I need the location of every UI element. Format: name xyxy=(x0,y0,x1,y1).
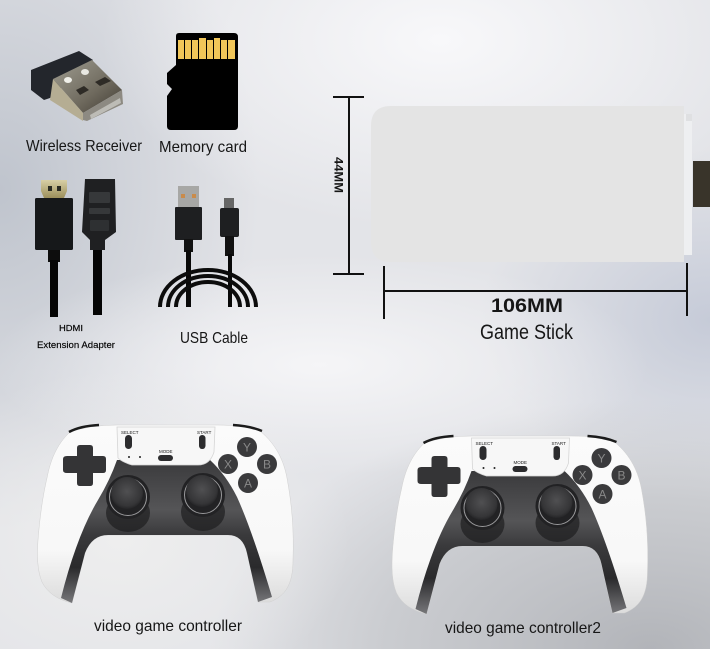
mode button: MODE xyxy=(514,460,527,465)
mode button xyxy=(512,460,528,472)
panel: HDMI extension adapter xyxy=(35,179,116,351)
icon: micro-USB plug xyxy=(220,198,239,307)
d-pad xyxy=(418,456,460,497)
icon: cable coil xyxy=(160,270,256,307)
indicator dots xyxy=(482,467,496,469)
face buttons: Y xyxy=(597,452,606,466)
face buttons xyxy=(572,448,632,504)
panel: game stick xyxy=(332,97,710,344)
start button xyxy=(552,441,566,460)
label: 44MM: 44MM xyxy=(332,157,346,193)
icon: HDMI female plug xyxy=(82,179,116,315)
height dimension line xyxy=(333,97,364,274)
label: video game controller: video game controller xyxy=(94,618,243,635)
touchpad xyxy=(472,438,570,476)
face buttons: X xyxy=(578,468,587,482)
face buttons xyxy=(218,437,277,493)
start button: START xyxy=(197,430,212,435)
game stick body xyxy=(371,106,692,262)
game stick plug xyxy=(693,161,710,207)
icon: HDMI male plug xyxy=(35,180,73,317)
mode button xyxy=(158,449,173,461)
indicator dots xyxy=(128,456,141,458)
label: Memory card: Memory card xyxy=(159,139,247,156)
panel: memory card xyxy=(159,33,247,156)
controller illustration xyxy=(37,425,293,603)
face buttons: B xyxy=(263,458,271,472)
select button: SELECT xyxy=(476,441,493,446)
select button xyxy=(121,430,139,449)
right thumbstick xyxy=(181,473,225,531)
label: 106MM: 106MM xyxy=(491,296,563,317)
face buttons: A xyxy=(598,488,607,502)
select button: SELECT xyxy=(121,430,139,435)
face buttons: B xyxy=(617,468,626,482)
panel: video game controller xyxy=(37,425,293,635)
shoulder buttons xyxy=(69,425,262,432)
face buttons: X xyxy=(224,458,232,472)
dark center panel xyxy=(416,471,626,614)
start button: START xyxy=(552,441,566,446)
icon: micro SD card xyxy=(167,33,238,130)
label: Extension Adapter: Extension Adapter xyxy=(37,340,115,351)
controller body xyxy=(392,436,648,614)
face buttons: Y xyxy=(243,440,251,454)
shoulder buttons xyxy=(424,436,616,443)
dark center panel xyxy=(61,460,272,603)
start button xyxy=(197,430,212,449)
left thumbstick xyxy=(460,486,504,543)
d-pad xyxy=(63,445,106,486)
panel: USB cable xyxy=(160,186,256,347)
mode button: MODE xyxy=(159,449,172,454)
panel: wireless receiver xyxy=(26,51,143,155)
icon: wireless receiver dongle xyxy=(31,51,123,121)
panel: video game controller 2 xyxy=(392,436,648,637)
width dimension line xyxy=(384,263,687,319)
controller body xyxy=(37,425,293,603)
label: HDMI: HDMI xyxy=(59,323,83,333)
face buttons: A xyxy=(244,476,252,490)
select button xyxy=(476,441,493,460)
right thumbstick xyxy=(536,484,580,542)
label: video game controller2: video game controller2 xyxy=(445,620,601,637)
icon: USB-A plug xyxy=(175,186,202,307)
label: Wireless Receiver: Wireless Receiver xyxy=(26,138,143,155)
left thumbstick xyxy=(106,475,150,532)
controller illustration 2 xyxy=(392,436,648,614)
label: USB Cable: USB Cable xyxy=(180,330,248,347)
label: Game Stick: Game Stick xyxy=(480,321,573,344)
touchpad xyxy=(117,427,215,465)
